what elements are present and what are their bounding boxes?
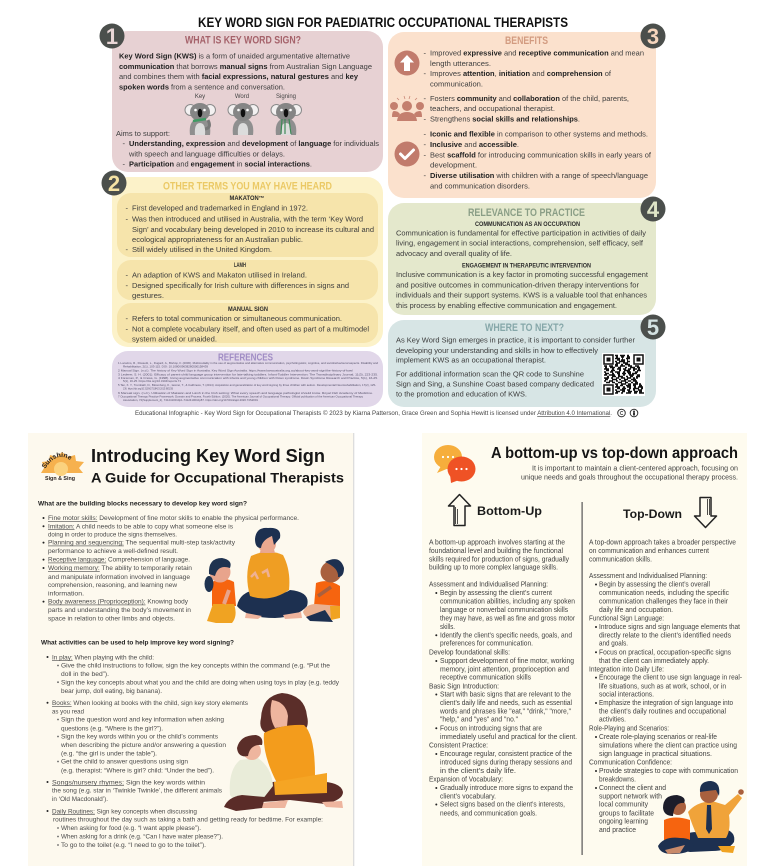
title: introducing key word sign: Introducing Key Word Sign (91, 445, 325, 466)
activities list: bear jump, doll eating, big banana). (61, 688, 162, 695)
column: top-down text (589, 540, 742, 834)
section: communication as an occupation (396, 222, 646, 258)
card: manual sign: system aided or unaided. (132, 334, 217, 344)
activities list: Books: When looking at books with the child, sign key story elements (52, 700, 248, 707)
activities list: as you read (52, 708, 85, 715)
title: bottom-up vs top-down: A bottom-up vs top-down approach (491, 445, 738, 462)
arrow: up (448, 494, 470, 526)
card: makaton: - (126, 204, 128, 213)
column: bottom-up text: "help," and "yes" and "no." (440, 717, 519, 724)
activities list: questions (e.g. “Where is the girl?”). (61, 725, 163, 732)
subtitle: guide for occupational therapists: A Guide for Occupational Therapists (91, 470, 344, 486)
column: bottom-up text: skills required for production of signs, gradually (429, 556, 570, 563)
icon: koala word (228, 103, 258, 135)
card: manual sign: MANUAL SIGN (228, 307, 268, 313)
aims list: - (122, 160, 126, 168)
column: top-down text: that the client can immediately apply. (599, 658, 709, 665)
column: top-down text: communication needs, including the specific (599, 590, 730, 597)
panel: where to next (388, 314, 666, 407)
column: top-down text: social interactions. (599, 692, 654, 699)
activities list: Sign the question word and key information when asking (61, 717, 225, 724)
benefits list: - (424, 69, 426, 78)
column: bottom-up text: Develop foundational skills: (429, 649, 510, 656)
column: bottom-up text: they may have, as well as fine and gross motor (440, 615, 576, 622)
heading: where to next: WHERE TO NEXT? (485, 322, 564, 334)
card: makaton: Was then introduced and utilised in Australia, with the term ‘Key Word (132, 215, 363, 224)
next steps text (396, 336, 635, 399)
reference list: 5(1), 16-25. https://doi.org/10.3104/reports.71 (123, 379, 182, 383)
benefits list: - (424, 140, 426, 149)
column: bottom-up text: immediately useful and practical for the client. (440, 734, 577, 741)
column: top-down text: sign language in practical situations. (599, 751, 712, 758)
logo: sunshine sign and sing: Sunshine (42, 452, 72, 468)
column: bottom-up text: language or nonverbal communication skills (440, 607, 569, 614)
icon: koala key (185, 103, 216, 135)
activities list: Sign the key concepts about what you and the child are doing when using toys in play (e.g. teddy (61, 679, 340, 686)
benefits list: development. (430, 161, 477, 170)
building blocks list: doing in order to produce the signs themselves. (48, 531, 177, 538)
column: top-down text: support network with (599, 793, 662, 800)
definition text (119, 52, 372, 92)
benefits list: - (424, 114, 426, 123)
column: bottom-up text: client’s daily life and needs, such as essential (440, 700, 572, 707)
koala sign labels: Signing (276, 94, 296, 100)
panel: benefits (388, 24, 666, 198)
reference list: Association, 74(Supplement_2), 7412410010p1-7412410010p87. https://doi.org/10.5014/ajot.2020.74S2001 (123, 398, 259, 402)
column: bottom-up text: Start with basic signs that are relevant to the (440, 692, 571, 699)
card: makaton (117, 193, 378, 257)
building blocks list: and manipulate information involved in language (48, 574, 191, 581)
heading: building blocks: What are the building blocks necessary to develop key word sign? (38, 501, 247, 508)
card: lamh: - (126, 270, 128, 280)
column: bottom-up text: receptive communication skills (440, 675, 532, 682)
column: bottom-up text: Gradually introduce more signs to expand the (440, 785, 573, 792)
icon: up arrow (394, 50, 420, 76)
column: bottom-up text: communication abilities, including any spoken (440, 599, 575, 606)
number badge 1: 1 (106, 24, 118, 49)
column: top-down text: Functional Sign Language: (589, 615, 664, 622)
column: bottom-up text: foundational level and building the functional (429, 548, 563, 555)
column: top-down text: Communication Confidence: (589, 760, 672, 767)
reference list: Rehabilitation, 2(1), 103-115. DOI: 10.1080/09638280500158439 (123, 364, 209, 368)
subtitle: It is important to maintain a client-centered approach, focusing on (532, 466, 738, 472)
reference list: 5 Tan, X. Y., Trembath, D., Bloomberg, K., Iacono, T., & Caithness, T. (2014). Acquisition and generalization of key word signing by three children with autism. Developmental Neurorehabilitation, 17(2), 125- (118, 383, 376, 387)
card: makaton: Still widely utilised in the United Kingdom. (132, 245, 272, 254)
section: engagement in therapeutic intervention: and positive outcomes in communication-driven therapy interventions for (396, 280, 639, 289)
activities list: routines throughout the day such as taking a bath and getting ready for bedtime. For example: (53, 817, 323, 824)
icon: check (394, 142, 420, 166)
activities list: (e.g. therapist: “Where is girl? child: “Under the bed”). (61, 767, 214, 774)
aims list: Understanding, expression and development of language for individuals (129, 139, 379, 148)
activities list: Sign the key words within you or the child’s comments (61, 734, 218, 741)
card: lamh: An adaption of KWS and Makaton utilised in Ireland. (132, 270, 307, 280)
activities list: In play: When playing with the child: (52, 654, 154, 661)
subtitle: unique needs and goals throughout the occupational therapy process. (521, 474, 738, 482)
panel: bottom-up vs top-down (422, 433, 747, 866)
panel: other terms (102, 170, 383, 347)
activities list: When asking for food (e.g. “I want apple please”). (61, 825, 201, 832)
reference list (118, 361, 379, 402)
column: top-down text: and goals. (599, 641, 628, 648)
column: top-down text: life situations, such as at work, school, or in (599, 683, 726, 690)
next steps text: to the promotion and education of KWS. (396, 390, 527, 399)
column: top-down text: communication skills. (589, 556, 652, 563)
QR code (602, 353, 645, 396)
column: top-down text: directly relate to the client’s identified needs (599, 632, 732, 639)
column: top-down text: Assessment and Individualised Planning: (589, 573, 707, 580)
title: KEY WORD SIGN FOR PAEDIATRIC OCCUPATIONAL THERAPISTS (198, 14, 568, 30)
building blocks list: Imitation: A child needs to be able to copy what someone else is (48, 523, 233, 530)
heading: benefits: BENEFITS (505, 35, 548, 47)
section: engagement in therapeutic intervention: this process by enabling effective communication and engagement. (396, 301, 617, 310)
building blocks list: performance to achieve a well-defined result. (48, 548, 178, 555)
aims list: Participation and engagement in social interactions. (129, 160, 312, 168)
column: bottom-up text: needs, and communication goals. (440, 810, 537, 817)
benefits list: - (424, 150, 426, 159)
icon: creative commons (618, 409, 638, 417)
column: bottom-up text: building up to more complex language skills. (429, 565, 558, 572)
column: bottom-up text: words and phrases like "eat," "drink," "more," (439, 708, 572, 715)
benefits list: Inclusive and accessible. (430, 140, 519, 149)
benefits list: and communication disorders. (430, 181, 530, 190)
column: bottom-up text: preferences for communication. (440, 641, 533, 648)
next steps text: As Key Word Sign emerges in practice, it is important to consider further (396, 336, 635, 345)
building blocks list: space in relation to other limbs and objects. (48, 615, 175, 622)
column: bottom-up text: skills. (440, 624, 455, 631)
card: makaton: Sign’ and vocabulary being developed in 2010 to increase its cultural and (132, 225, 374, 234)
activities list: To go to the toilet (e.g. “I need to go to the toilet”). (61, 842, 206, 849)
number badge 2 (102, 170, 126, 196)
column: bottom-up text: introduced signs during therapy sessions and (440, 760, 572, 767)
benefits list: - (424, 130, 426, 139)
column: bottom-up text: Basic Sign Introduction: (429, 683, 499, 690)
benefits list: Improves attention, initiation and comprehension of (430, 69, 612, 78)
benefits list: - (424, 94, 426, 103)
activities list: (e.g. “the girl is under the table”). (61, 750, 157, 757)
number badge 4: 4 (647, 197, 660, 222)
column: bottom-up text: Encourage regular, consistent practice of the (440, 751, 572, 758)
number badge 1 (100, 24, 124, 49)
reference list: 7 Occupational Therapy Practice Framework: Domain and Process, Fourth Edition. (2020). The American Journal of Occupational Therapy: Official publication of the American Occupational Therapy (118, 394, 364, 398)
building blocks list: information. (48, 590, 84, 597)
reference list: 136. https://doi.org/10.3109/17518423.2013.863236 (123, 386, 173, 390)
card: manual sign: Refers to total communication or simultaneous communication. (132, 314, 342, 323)
card: lamh: Designed specifically for Irish culture with differences in signs and (132, 281, 349, 290)
panel: relevance to practice (388, 196, 666, 315)
building blocks list: Body awareness (Proprioception): Knowing body (48, 599, 189, 606)
column: top-down text: on communication and enhances current (589, 548, 709, 555)
building blocks list: Planning and sequencing: The sequential multi-step task/activity (48, 540, 236, 547)
number badge 2: 2 (108, 171, 120, 196)
benefits list: Diverse utilisation with children with a range of speech/language (430, 171, 648, 180)
column: top-down text: Emphasize the integration of sign language into (599, 700, 733, 707)
section: communication as an occupation: advocacy and overall quality of life. (396, 249, 512, 258)
column: top-down text: Role-Playing and Scenarios: (589, 725, 669, 732)
building blocks list: Fine motor skills: Development of fine motor skills to enable the physical performance. (48, 515, 299, 522)
reference list: 2 Manual Sign. (n.d.). The history of Key Word Sign in Australia. Key Word Sign Australia. https://www.kwsaustralia.org.au/about-key-word-sign/the-history-of-kws/ (118, 368, 353, 372)
section: communication as an occupation: living, engagement in social interactions, comprehension, self efficacy, self (396, 239, 644, 248)
koala sign labels (195, 94, 296, 100)
reference list: 4 Foreman, P., & Crews, G. (1998). Using augmentative communication with infants and young children with Down syndrome. Down Syndrome Research and Practice, 5(1), 16-25. (118, 376, 378, 380)
benefits list: communication. (430, 79, 483, 88)
number badge 3: 3 (647, 24, 659, 49)
heading: other terms: OTHER TERMS YOU MAY HAVE HEARD (163, 180, 332, 192)
activities list: the song (e.g. star in ‘Twinkle Twinkle’, the different animals (52, 788, 222, 795)
divider (582, 502, 583, 855)
logo: sunshine sign and sing: Sign & Sing (45, 476, 75, 482)
next steps text: Sign and Sing, a Sunshine Coast based company dedicated (396, 379, 594, 388)
next steps text: For additional information scan the QR code to Sunshine (396, 369, 584, 378)
next steps text: developing your understanding and skills in how to effectively (396, 346, 598, 355)
heading: relevance: RELEVANCE TO PRACTICE (468, 207, 585, 219)
activities list: Get the child to answer questions using sign (61, 759, 189, 766)
benefits list: Best scaffold for introducing communication skills in early years of (430, 150, 652, 159)
column: top-down text: the client’s daily routines and occupational (599, 708, 726, 715)
card: makaton: ecological appropriateness for an Australian public. (132, 235, 303, 244)
koala sign labels: Key (195, 94, 205, 100)
number badge 3 (640, 24, 666, 49)
heading: references: REFERENCES (218, 352, 273, 364)
heading: top-down: Top-Down (623, 507, 682, 521)
column: top-down text: Provide strategies to cope with communication (599, 768, 738, 775)
column: top-down text: simulations where the client can practice using (599, 742, 737, 749)
column: bottom-up text: Consistent Practice: (429, 742, 488, 749)
section: communication as an occupation: Communication is fundamental for effective participation in activities of daily (396, 228, 646, 237)
column: top-down text: daily life and occupation. (599, 607, 673, 614)
column: bottom-up text: Suppport development of fine motor, working (440, 658, 574, 665)
section: engagement in therapeutic intervention: ENGAGEMENT IN THERAPEUTIC INTERVENTION (462, 263, 591, 269)
card: manual sign: Not a complete vocabulary itself, and often used as part of a multimodel (132, 324, 369, 334)
column: bottom-up text: Identify the client’s specific needs, goals, and (440, 632, 572, 639)
number badge 5 (640, 314, 666, 340)
column: top-down text: breakdowns. (599, 776, 636, 783)
section: communication as an occupation: COMMUNICATION AS AN OCCUPATION (475, 222, 580, 228)
card: lamh: - (126, 281, 128, 290)
column: top-down text: activities. (599, 717, 626, 724)
illustration: boy signing (303, 559, 344, 622)
benefits list: - (424, 49, 426, 58)
illustration: girl (204, 558, 236, 623)
reference list: 6 Manual sign. (n.d.). Utilisation of Makaton and Lámh in the Irish setting: What every speech and language pathologist should know. Royal Irish Academy of Medicine. (118, 391, 373, 395)
heading: activities: What activities can be used to help improve key word signing? (41, 640, 234, 646)
column: bottom-up text: Assessment and Individualised Planning: (429, 582, 548, 589)
benefits list (424, 49, 652, 190)
column: bottom-up text: memory, joint attention, proprioception and (440, 666, 569, 673)
building blocks list: Working memory: The ability to temporarily retain (48, 565, 193, 572)
card: manual sign: - (126, 324, 128, 334)
activities list: When asking for a drink (e.g. “Can I have water please?”). (61, 834, 223, 841)
column: top-down text: Create role-playing scenarios or real-life (599, 734, 717, 741)
heading: what is key word sign: WHAT IS KEY WORD SIGN? (185, 34, 301, 46)
illustration: mother reading with child (224, 693, 343, 811)
benefits list: length utterances. (430, 59, 491, 68)
aims list: Aims to support: (116, 129, 170, 138)
benefits list: teachers, and occupational therapist. (430, 104, 555, 113)
column: top-down text: groups to facilitate (599, 810, 654, 817)
column: bottom-up text: Expansion of Vocabulary: (429, 776, 503, 783)
activities list: in ‘Old Macdonald’). (52, 796, 108, 803)
definition text: and combines them with facial expressions, natural gestures and key (119, 72, 359, 81)
column: top-down text: Begin by assessing the client’s overall (599, 581, 710, 588)
card: manual sign: - (126, 314, 128, 323)
panel: what is key word sign (100, 24, 383, 172)
column: top-down text: A top-down approach takes a broader perspective (589, 540, 736, 547)
column: top-down text: and practice (599, 827, 636, 834)
card: makaton: - (126, 215, 128, 224)
column: bottom-up text: Select signs based on the client’s interests, (440, 802, 565, 809)
building blocks list (42, 515, 299, 622)
reference list: 3 Lederer, S. H. (2001). Efficacy of parent-child language group intervention for late-talking toddlers. Infant-Toddler Intervention: The Transdisciplinary Journal, 11(3), 223-235. (118, 372, 378, 376)
card: lamh: gestures. (132, 291, 164, 300)
card: makaton: First developed and trademarked in England in 1972. (132, 204, 308, 213)
column: top-down text: Introduce signs and sign language elements that (599, 624, 740, 631)
column: top-down text: Focus on practical, occupation-specific signs (599, 649, 732, 656)
logo: sunshine sign and sing (41, 452, 84, 482)
card: makaton: - (126, 245, 128, 254)
definition text: Key Word Sign (KWS) is a form of unaided argumentative alternative (119, 52, 350, 61)
section: engagement in therapeutic intervention: Inclusive communication is a key factor in promoting successful engagement (396, 270, 649, 279)
column: bottom-up text: A bottom-up approach involves starting at the (429, 540, 565, 547)
arrow: down (694, 498, 716, 528)
column: bottom-up text: Begin by assessing the client’s current (440, 590, 552, 597)
column: bottom-up text (429, 540, 577, 817)
subtitle (521, 466, 738, 482)
activities list: Songs/nursery rhymes: Sign the key words within (52, 779, 206, 786)
benefits list: Iconic and flexible in comparison to other systems and methods. (430, 130, 648, 139)
activities list: doll in the bed”). (61, 671, 109, 678)
activities list: Give the child instructions to follow, sign the key concepts within the command (e.g. “Put the (61, 663, 331, 670)
benefits list: Fosters community and collaboration of the child, parents, (430, 94, 629, 103)
card: manual sign (117, 303, 378, 344)
illustration: adult signing (237, 528, 308, 619)
activities list: when describing the picture and/or answering a question (60, 742, 227, 749)
building blocks list: Receptive language: Comprehension of language. (48, 557, 190, 564)
activities list (46, 654, 340, 849)
column: bottom-up text: in the client’s daily life. (440, 768, 516, 775)
panel: references (112, 351, 383, 407)
definition text: communication that borrows manual signs from Australian Sign Language (119, 62, 372, 71)
aims list (116, 129, 379, 168)
aims list: - (122, 139, 126, 148)
column: top-down text: Connect the client and (599, 785, 666, 792)
column: top-down text: local community (599, 802, 649, 809)
koala sign labels: Word (235, 94, 249, 100)
icon: koala signing (271, 103, 302, 135)
column: bottom-up text: Focus on introducing signs that are (440, 725, 542, 732)
reference list: 1 Lucarino, R., Rossetti, L., Dugard, A., Bishop, F. (2006). Multimodality in the use of augmentative and alternative communication, psycholinguistic, cognitive, and sociobehavioural aspects. Disability and (118, 361, 379, 365)
number badge 5: 5 (647, 315, 659, 340)
definition text: spoken words from a sentence and conversation. (119, 82, 285, 92)
building blocks list: parts and understanding the body’s movement in (48, 607, 192, 614)
benefits list: - (424, 171, 426, 180)
section: engagement in therapeutic intervention (396, 263, 649, 310)
card: lamh (117, 260, 378, 300)
column: bottom-up text: client’s vocabulary. (440, 793, 496, 800)
column: top-down text: communication challenges they face in their (599, 599, 729, 606)
aims list: with speech and language difficulties or delays. (128, 150, 285, 158)
card: lamh: LAMH (234, 263, 246, 269)
column: top-down text: ongoing learning (599, 819, 648, 826)
next steps text: implement KWS as an occupational therapist. (396, 356, 546, 365)
illustration: man and boy (658, 781, 744, 854)
section: engagement in therapeutic intervention: individuals and their support systems. KWS is a valuable tool that enhances (396, 291, 647, 300)
heading: bottom-up: Bottom-Up (477, 504, 542, 518)
icon: speech bubbles (434, 445, 476, 483)
building blocks list: comprehension, reasoning, and learning new (48, 582, 178, 589)
benefits list: Strengthens social skills and relationships. (430, 114, 580, 123)
number badge 4 (640, 196, 666, 222)
credit line: Educational Infographic - Key Word Sign for Occupational Therapists © 2023 by Kiarna Patterson, Grace Green and Sophia Hewitt is licensed under Attribution 4.0 International. (135, 409, 612, 417)
panel: introducing key word sign (28, 433, 354, 866)
column: top-down text: Encourage the client to use sign language in real- (599, 675, 742, 682)
icon: people (390, 96, 424, 121)
card: makaton: MAKATON™ (230, 195, 264, 202)
benefits list: Improved expressive and receptive communication and mean (430, 49, 644, 58)
activities list: Daily Routines: Sign key concepts when discussing (52, 808, 198, 815)
column: top-down text: Integration into Daily Life: (589, 666, 664, 673)
